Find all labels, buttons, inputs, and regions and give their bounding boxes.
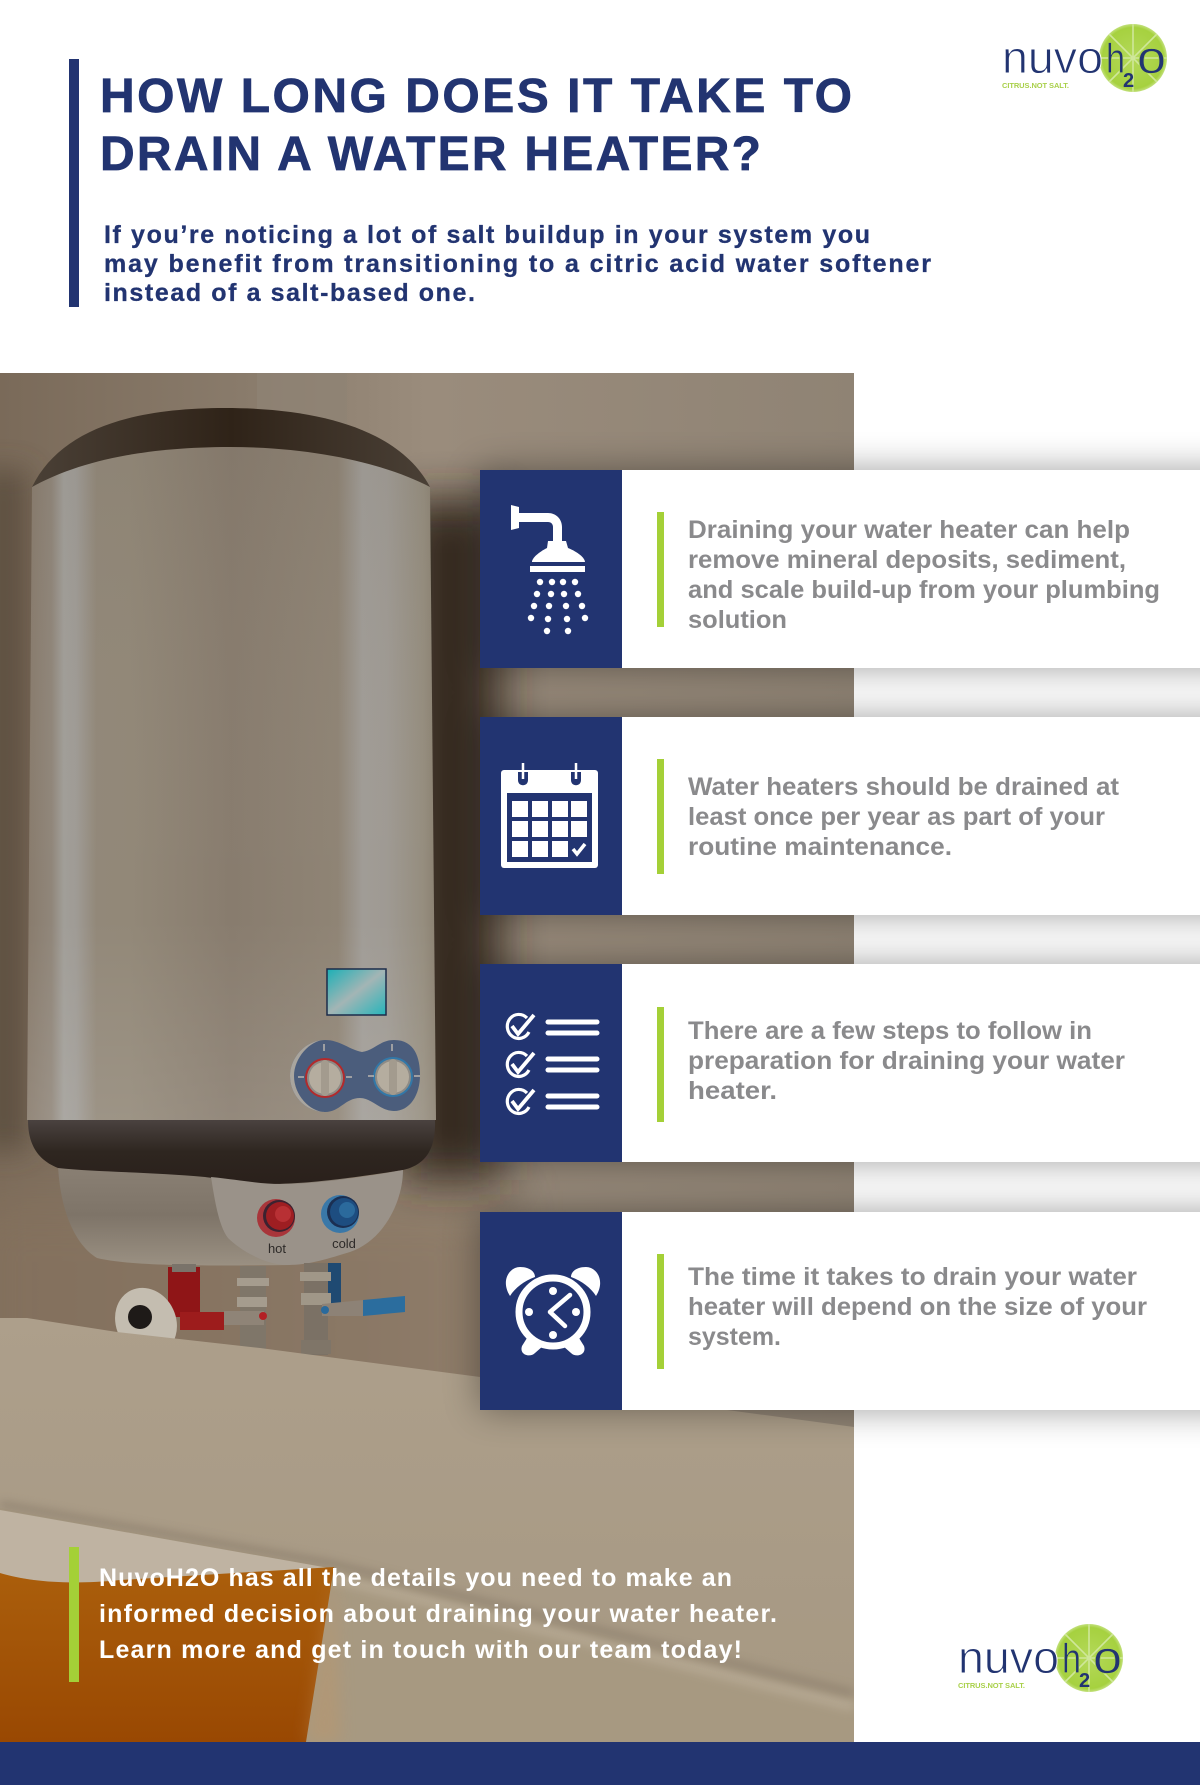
card text: preparation for draining your water bbox=[688, 1047, 1125, 1075]
accent bar bbox=[657, 512, 664, 627]
logo: top: o bbox=[1137, 32, 1166, 83]
hot knob bbox=[257, 1199, 295, 1256]
wall bbox=[0, 373, 854, 1427]
closing call to action: informed decision about draining your water heater. bbox=[99, 1600, 777, 1628]
logo: top: 2 bbox=[1123, 70, 1134, 92]
icon: calendar bbox=[501, 763, 598, 868]
control dials bbox=[290, 1040, 420, 1112]
cold knob: cold bbox=[332, 1236, 356, 1251]
card text bbox=[688, 516, 1160, 634]
intro text: instead of a salt-based one. bbox=[104, 279, 475, 307]
footer band bbox=[0, 1742, 1200, 1785]
accent bar bbox=[657, 1254, 664, 1369]
logo: bottom: CITRUS.NOT SALT. bbox=[958, 1681, 1025, 1690]
card text bbox=[688, 773, 1120, 861]
title: HOW LONG DOES IT TAKE TO bbox=[100, 70, 852, 123]
panel: card 4 drain time bbox=[480, 1212, 1200, 1410]
orange glass bbox=[0, 1567, 340, 1742]
card text bbox=[688, 1017, 1125, 1105]
intro text: may benefit from transitioning to a citric acid water softener bbox=[104, 250, 931, 278]
card shadows bbox=[480, 470, 1200, 1410]
foreground counter bbox=[0, 1318, 854, 1697]
accent bar bbox=[657, 759, 664, 874]
closing call to action: Learn more and get in touch with our team today! bbox=[99, 1636, 742, 1664]
card text: remove mineral deposits, sediment, bbox=[688, 546, 1126, 574]
logo: bottom: h bbox=[1062, 1635, 1081, 1682]
card text: The time it takes to drain your water bbox=[688, 1263, 1137, 1291]
pipes and valves bbox=[168, 1263, 405, 1355]
card text: least once per year as part of your bbox=[688, 803, 1105, 831]
water heater bbox=[27, 408, 436, 1366]
closing call to action: NuvoH2O has all the details you need to make an bbox=[99, 1564, 732, 1592]
title accent bar bbox=[69, 59, 79, 307]
logo: bottom: 2 bbox=[1079, 1670, 1090, 1692]
logo: bottom: o bbox=[1093, 1632, 1122, 1683]
panel: card 3 preparation steps bbox=[480, 964, 1200, 1162]
title bbox=[100, 70, 852, 181]
closing call to action bbox=[99, 1564, 777, 1664]
logo: top: nuvo bbox=[1002, 32, 1103, 83]
card text bbox=[688, 1263, 1147, 1351]
logo: top bbox=[1002, 24, 1167, 92]
card text: routine maintenance. bbox=[688, 833, 952, 861]
display screen bbox=[327, 969, 386, 1015]
card text: heater. bbox=[688, 1077, 777, 1105]
card text: Water heaters should be drained at bbox=[688, 773, 1120, 801]
card text: solution bbox=[688, 606, 787, 634]
panel: card 2 drain frequency bbox=[480, 717, 1200, 915]
card text: and scale build-up from your plumbing bbox=[688, 576, 1160, 604]
card text: system. bbox=[688, 1323, 781, 1351]
panel: card 1 draining benefits bbox=[480, 470, 1200, 668]
cold knob bbox=[321, 1195, 359, 1251]
accent bar bbox=[657, 1007, 664, 1122]
card text: Draining your water heater can help bbox=[688, 516, 1130, 544]
card text: heater will depend on the size of your bbox=[688, 1293, 1147, 1321]
icon: checklist bbox=[507, 1014, 597, 1113]
logo: top: h bbox=[1106, 35, 1125, 82]
wall escutcheon bbox=[115, 1288, 177, 1338]
intro text bbox=[104, 221, 931, 307]
card text: There are a few steps to follow in bbox=[688, 1017, 1092, 1045]
icon: alarm clock bbox=[506, 1267, 600, 1355]
intro text: If you’re noticing a lot of salt buildup in your system you bbox=[104, 221, 870, 249]
logo: bottom bbox=[958, 1624, 1123, 1692]
logo: top: CITRUS.NOT SALT. bbox=[1002, 81, 1069, 90]
background photo: water heater bbox=[0, 373, 854, 1742]
closing accent bar bbox=[69, 1547, 79, 1682]
logo: bottom: nuvo bbox=[958, 1632, 1059, 1683]
title: DRAIN A WATER HEATER? bbox=[100, 128, 761, 181]
icon: shower head bbox=[511, 505, 588, 634]
hot knob: hot bbox=[268, 1241, 286, 1256]
